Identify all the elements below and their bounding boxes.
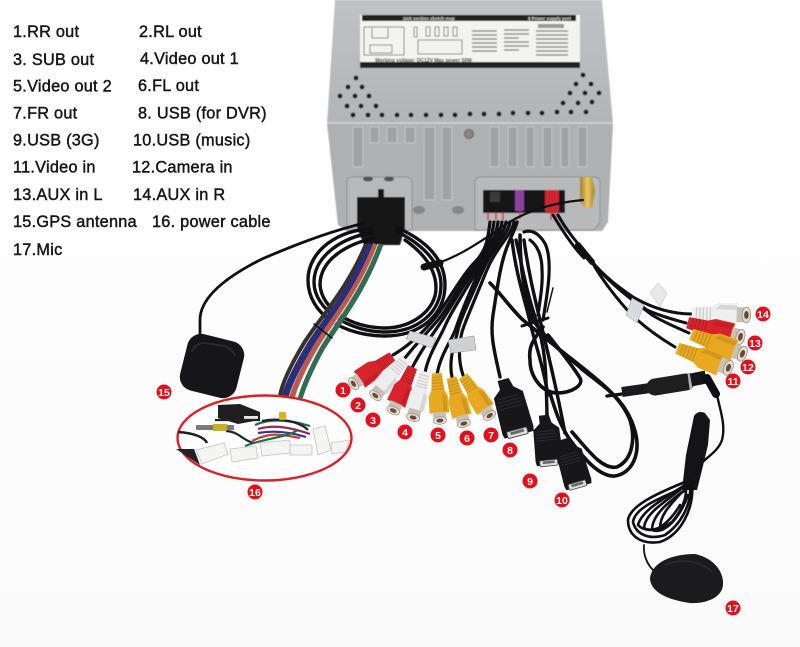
badge 13: 13 <box>749 338 761 350</box>
RCA connector 11 <box>673 337 737 380</box>
badge 12: 12 <box>742 362 754 374</box>
AUX right-angle plug <box>607 373 716 396</box>
badge 5: 5 <box>435 430 441 442</box>
badge 17: 17 <box>727 603 739 615</box>
head unit <box>327 0 613 245</box>
RCA connector 2 <box>365 352 413 405</box>
rear plate <box>327 123 613 231</box>
power cable inset <box>176 396 352 480</box>
USB connector 10 <box>552 435 593 492</box>
legend labels: 6.FL out <box>138 77 199 95</box>
badge 15: 15 <box>158 387 170 399</box>
legend labels: 4.Video out 1 <box>140 50 239 68</box>
RCA connector 1 <box>345 348 398 394</box>
badge 13 <box>748 336 762 350</box>
cable to antenna <box>441 200 583 262</box>
number badges <box>156 306 770 616</box>
USB connector 8 <box>489 375 535 440</box>
inset wires <box>178 420 310 446</box>
RCA connector 14 <box>691 302 751 327</box>
legend labels: 14.AUX in R <box>133 186 225 204</box>
badge 7: 7 <box>488 430 494 442</box>
badge 17 <box>726 600 740 616</box>
legend labels: 12.Camera in <box>132 158 233 176</box>
cable tag left <box>406 331 436 348</box>
badge 10: 10 <box>556 495 568 507</box>
legend labels: 10.USB (music) <box>133 132 250 150</box>
badge 3: 3 <box>370 415 376 427</box>
yellow plug <box>279 412 286 420</box>
badge 4: 4 <box>402 427 408 439</box>
badge 14: 14 <box>757 309 769 321</box>
RCA connector 6 <box>442 375 475 430</box>
badge 7 <box>484 428 498 442</box>
badge 16: 16 <box>249 487 261 499</box>
plate screw <box>464 130 474 138</box>
legend labels: 8. USB (for DVR) <box>138 104 267 122</box>
power wire bundle <box>280 244 381 399</box>
badge 8: 8 <box>507 445 513 457</box>
legend labels: 1.RR out <box>13 23 79 41</box>
badge 8 <box>502 442 518 458</box>
harness connector <box>357 189 405 245</box>
legend labels: 5.Video out 2 <box>13 78 112 96</box>
badge 10 <box>554 492 570 508</box>
GPS antenna puck <box>177 331 247 401</box>
white harness plugs <box>196 426 350 464</box>
badge 11: 11 <box>727 376 739 388</box>
legend labels: 7.FR out <box>13 104 78 122</box>
GPS cable <box>200 223 365 340</box>
AV cable bundle <box>393 222 514 377</box>
badge 9: 9 <box>527 476 533 488</box>
legend labels: 3. SUB out <box>13 51 94 69</box>
adapter box <box>218 404 260 424</box>
badge 12 <box>740 360 756 374</box>
vent holes <box>338 73 601 117</box>
rating sticker: 8 Power supply port <box>528 16 572 21</box>
badge 2: 2 <box>355 400 361 412</box>
badge 16 <box>248 484 262 500</box>
AV in cables <box>553 215 692 347</box>
cable tag right <box>448 336 476 353</box>
right connector recess <box>475 177 600 230</box>
badge 5 <box>430 428 446 442</box>
legend labels: 17.Mic <box>13 241 62 259</box>
legend labels: 13.AUX in L <box>13 186 103 204</box>
red plug <box>545 190 559 212</box>
badge 3 <box>366 412 380 428</box>
RCA connector 3 <box>383 363 422 418</box>
badge 6 <box>460 430 474 446</box>
harness cable loop <box>308 228 445 336</box>
top cover <box>327 0 613 124</box>
badge 4 <box>398 424 412 440</box>
legend labels: 11.Video in <box>13 158 96 176</box>
mic cable and coil <box>628 395 723 570</box>
rating sticker: Working voltage: DC12V Max power 50W <box>375 58 472 64</box>
legend labels: 15.GPS antenna <box>13 213 138 231</box>
USB and mic cable bundle <box>490 222 637 476</box>
plate ribs <box>353 127 587 200</box>
microphone <box>650 554 723 603</box>
badge 1: 1 <box>340 385 346 397</box>
badge 14 <box>756 306 770 322</box>
RCA connector 7 <box>455 371 500 424</box>
legend labels: 9.USB (3G) <box>13 132 100 150</box>
gold antenna connector <box>580 177 595 208</box>
antenna plug <box>196 425 234 430</box>
RCA connector 12 <box>687 323 751 366</box>
RCA connector 13 <box>685 312 748 349</box>
legend labels <box>13 23 271 259</box>
badge 6: 6 <box>464 433 470 445</box>
badge 11 <box>726 374 740 388</box>
rating sticker: Unit section sketch map <box>403 16 455 21</box>
left connector recess <box>347 177 412 230</box>
badge 9 <box>522 474 538 488</box>
input cable tags <box>626 283 667 323</box>
RCA connector 4 <box>402 369 435 424</box>
badge 2 <box>350 398 366 412</box>
purple plug <box>515 190 524 211</box>
legend labels: 2.RL out <box>139 23 202 41</box>
port block <box>483 190 565 213</box>
legend labels: 16. power cable <box>152 213 271 231</box>
RCA connector 5 <box>427 372 450 425</box>
rating sticker <box>360 15 580 68</box>
USB connector 9 <box>531 414 564 467</box>
badge 15 <box>156 384 172 400</box>
badge 1 <box>336 382 350 398</box>
